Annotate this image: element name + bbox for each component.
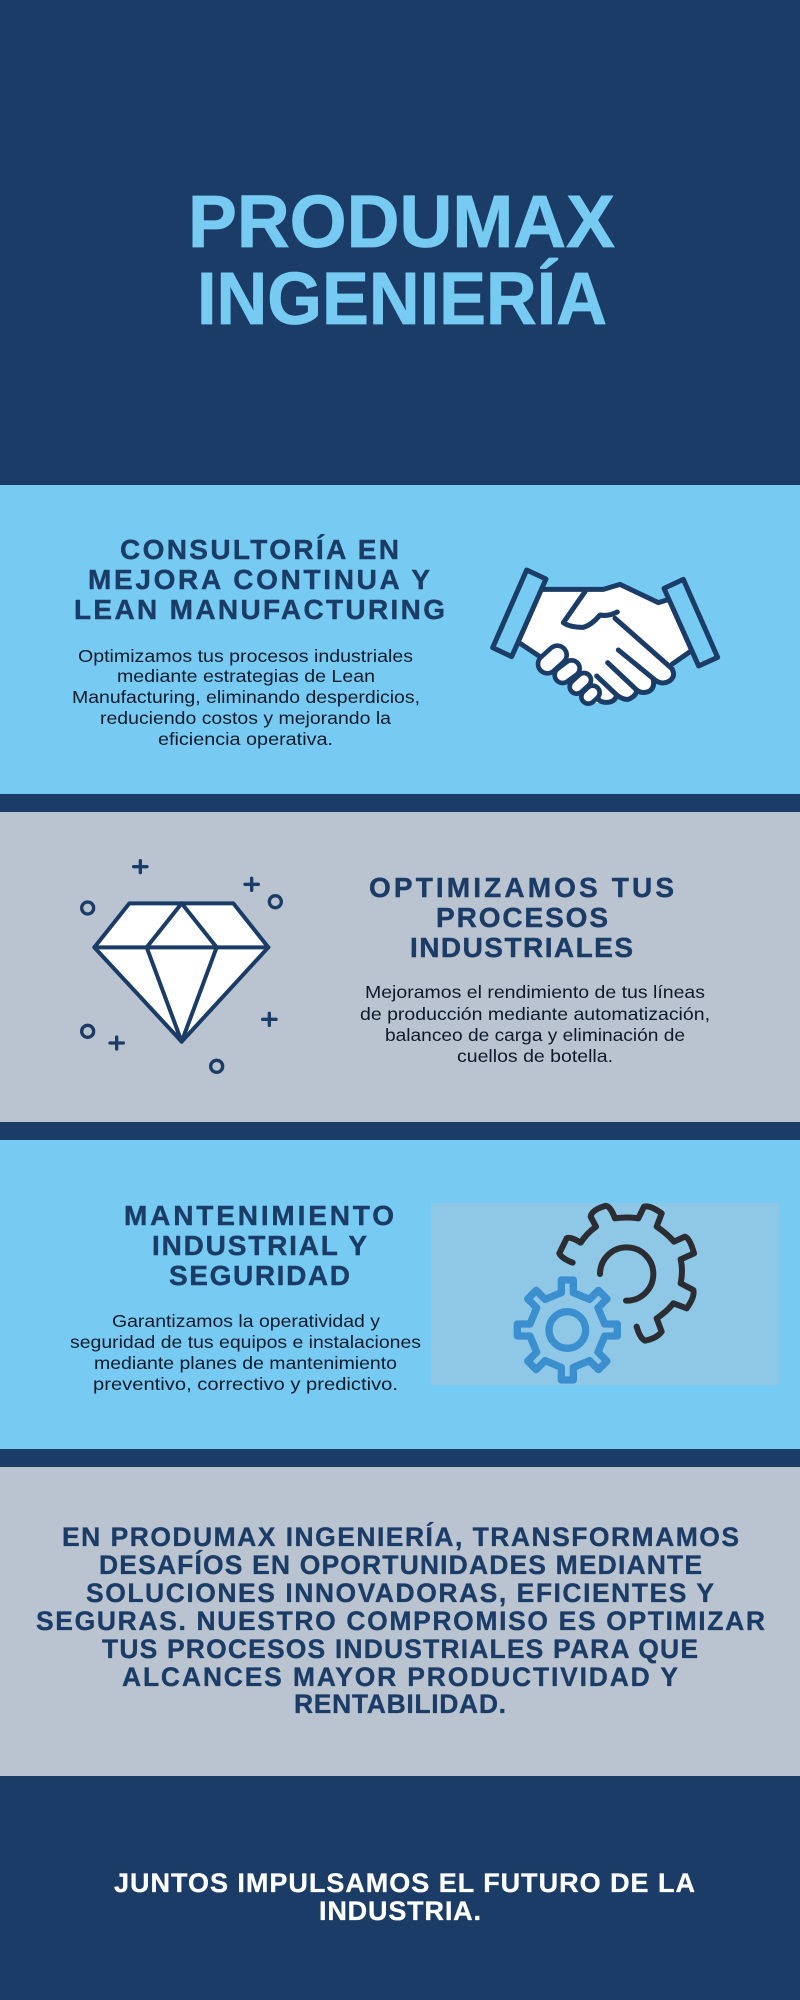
text block: compromiso: EN PRODUMAX INGENIERÍA, TRANSFORMAMOS xyxy=(62,1522,739,1552)
text block: compromiso: SOLUCIONES INNOVADORAS, EFICIENTES Y xyxy=(86,1578,714,1608)
text block: mantenimiento: preventivo, correctivo y predictivo. xyxy=(93,1374,398,1394)
closing statement xyxy=(114,1868,695,1926)
text block: optimizamos: Mejoramos el rendimiento de tus líneas xyxy=(365,982,705,1002)
heading: consultoría: MEJORA CONTINUA Y xyxy=(88,564,430,595)
text block: consultoría: reduciendo costos y mejorando la xyxy=(100,708,391,728)
text block: optimizamos: cuellos de botella. xyxy=(457,1046,613,1066)
text block: consultoría xyxy=(72,646,420,749)
icon: handshake xyxy=(493,570,718,703)
heading: optimizamos xyxy=(369,872,674,963)
text block: compromiso: RENTABILIDAD. xyxy=(294,1689,506,1719)
text block: optimizamos: de producción mediante automatización, xyxy=(360,1004,710,1024)
text block: consultoría: eficiencia operativa. xyxy=(158,729,333,749)
heading: mantenimiento: INDUSTRIAL Y xyxy=(152,1230,367,1261)
text block: optimizamos xyxy=(360,982,710,1066)
text block: compromiso xyxy=(36,1522,765,1719)
text block: compromiso: SEGURAS. NUESTRO COMPROMISO ES OPTIMIZAR xyxy=(36,1606,765,1636)
text block: mantenimiento xyxy=(70,1311,421,1394)
title xyxy=(188,180,615,340)
text block: compromiso: ALCANCES MAYOR PRODUCTIVIDAD Y xyxy=(122,1662,678,1692)
icon: gears xyxy=(431,1203,779,1385)
title: PRODUMAX xyxy=(188,180,615,263)
icon: diamond xyxy=(82,861,281,1072)
text block: mantenimiento: mediante planes de mantenimiento xyxy=(94,1353,397,1373)
heading: consultoría: LEAN MANUFACTURING xyxy=(74,594,445,625)
heading: mantenimiento: MANTENIMIENTO xyxy=(124,1200,394,1231)
panel: optimizamos xyxy=(0,812,800,1122)
panel: consultoría xyxy=(0,485,800,794)
panel: compromiso xyxy=(0,1467,800,1776)
closing statement: JUNTOS IMPULSAMOS EL FUTURO DE LA xyxy=(114,1868,695,1898)
text block: compromiso: TUS PROCESOS INDUSTRIALES PARA QUE xyxy=(102,1634,698,1664)
heading: consultoría xyxy=(74,534,445,625)
text block: consultoría: Optimizamos tus procesos industriales xyxy=(78,646,413,666)
text block: consultoría: Manufacturing, eliminando desperdicios, xyxy=(72,687,420,707)
heading: optimizamos: INDUSTRIALES xyxy=(410,932,633,963)
closing statement: INDUSTRIA. xyxy=(319,1896,481,1926)
text block: mantenimiento: seguridad de tus equipos e instalaciones xyxy=(70,1332,421,1352)
panel: mantenimiento xyxy=(0,1140,800,1449)
text block: consultoría: mediante estrategias de Lean xyxy=(117,666,375,686)
heading: consultoría: CONSULTORÍA EN xyxy=(120,534,399,565)
text block: optimizamos: balanceo de carga y eliminación de xyxy=(385,1025,685,1045)
title: INGENIERÍA xyxy=(197,257,607,340)
heading: optimizamos: PROCESOS xyxy=(436,902,608,933)
heading: mantenimiento: SEGURIDAD xyxy=(169,1260,350,1291)
heading: mantenimiento xyxy=(124,1200,394,1291)
text block: compromiso: DESAFÍOS EN OPORTUNIDADES MEDIANTE xyxy=(99,1550,702,1580)
heading: optimizamos: OPTIMIZAMOS TUS xyxy=(369,872,674,903)
text block: mantenimiento: Garantizamos la operatividad y xyxy=(112,1311,380,1331)
